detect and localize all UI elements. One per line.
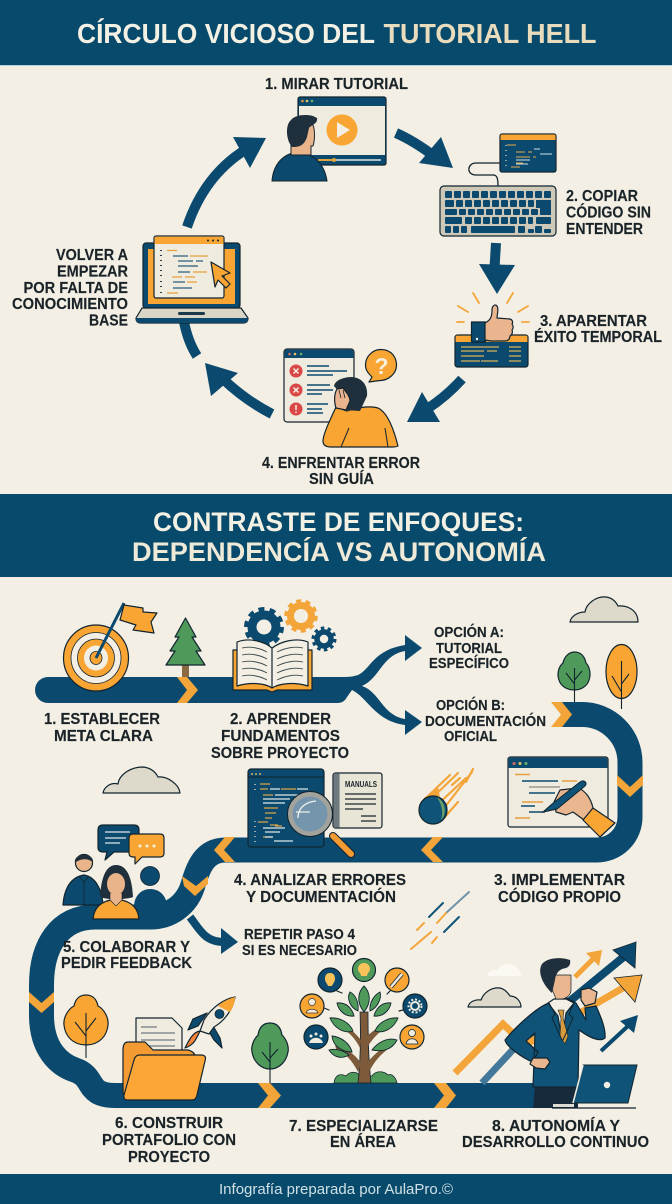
icon: green tree — [252, 1023, 288, 1083]
label: step 2 — [566, 188, 651, 238]
chevrons along the road — [29, 702, 643, 1108]
icon: pine tree — [166, 618, 205, 677]
label: step 1: 1. MIRAR TUTORIAL — [265, 76, 408, 93]
icon: people collaborating with speech bubbles — [63, 825, 167, 919]
label: step 5: PEDIR FEEDBACK — [61, 955, 192, 972]
label: return to start: VOLVER A — [56, 247, 128, 264]
label: step 8: DESARROLLO CONTINUO — [462, 1134, 649, 1151]
label: step 1 road: META CLARA — [54, 728, 153, 745]
label: step 7: 7. ESPECIALIZARSE — [289, 1118, 438, 1135]
header band: top title: CÍRCULO VICIOSO DEL — [77, 18, 375, 49]
icon: cloud top right — [570, 597, 638, 622]
icon: keyboard connected to code monitor — [440, 134, 556, 236]
label: step 1 road: 1. ESTABLECER — [44, 711, 160, 728]
label: step 7: EN ÁREA — [330, 1132, 396, 1151]
header band: top title: TUTORIAL HELL — [384, 18, 596, 49]
icon: orange tree left — [64, 995, 108, 1058]
label: step 2 road — [211, 711, 349, 762]
label: repeat step 4: SI ES NECESARIO — [242, 943, 357, 959]
icon: code screen, magnifier and manual — [248, 769, 382, 854]
label: option B: OFICIAL — [444, 729, 497, 745]
label: return to start: EMPEZAR — [57, 264, 128, 280]
icon: thumbs up over code card — [455, 293, 529, 367]
icon: speed lines — [411, 892, 469, 949]
label: step 5 — [61, 939, 192, 972]
label: repeat step 4 — [242, 927, 357, 959]
label: step 3: ÉXITO TEMPORAL — [534, 327, 662, 346]
label: return to start — [12, 247, 128, 330]
label: step 3 — [534, 313, 662, 346]
label: step 4 road — [234, 872, 406, 906]
label: option A: TUTORIAL — [436, 641, 502, 657]
header band: top title — [0, 0, 672, 66]
label: option A: OPCIÓN A: — [434, 623, 504, 641]
label: step 6: PORTAFOLIO CON — [102, 1132, 236, 1149]
label: option B: DOCUMENTACIÓN — [425, 712, 546, 730]
icon: clouds near businessman — [468, 963, 522, 1007]
icon: person watching video tutorial — [272, 97, 386, 181]
icon: window with hand writing code — [508, 757, 615, 837]
icon: green and orange trees — [558, 644, 637, 709]
arrow: step 1 to step 2 — [396, 133, 453, 168]
arrow: step 2 to step 3 — [479, 243, 515, 294]
label: step 7 — [289, 1118, 438, 1151]
label: step 6: PROYECTO — [128, 1149, 210, 1166]
label: step 3 road — [494, 872, 625, 906]
arrow: step 5 to step 1 — [187, 137, 266, 227]
icon: skill tree with topic bubbles — [300, 958, 427, 1083]
label: option A — [429, 623, 509, 672]
label: step 5: 5. COLABORAR Y — [63, 939, 190, 956]
label: step 4: 4. ENFRENTAR ERROR — [262, 455, 420, 472]
label: step 3 road: 3. IMPLEMENTAR — [494, 872, 625, 889]
header band: contrast of approaches: DEPENDENCÍA VS AUTONOMÍA — [132, 536, 546, 567]
label: step 2: ENTENDER — [566, 221, 643, 238]
label: return to start: CONOCIMIENTO — [12, 296, 128, 313]
road: winding path to the finish — [42, 714, 630, 1096]
label: step 2 road: SOBRE PROYECTO — [211, 745, 349, 762]
label: option B: OPCIÓN B: — [436, 696, 505, 714]
footer: Infografía preparada por AulaPro.© — [219, 1181, 453, 1198]
label: return to start: POR FALTA DE — [24, 280, 128, 297]
icon: open book with gears — [233, 601, 335, 692]
footer — [0, 1174, 672, 1204]
arrow: step 3 to step 4 — [407, 379, 462, 422]
label: repeat step 4: REPETIR PASO 4 — [244, 927, 355, 943]
label: return to start: BASE — [89, 312, 128, 330]
label: step 4 — [262, 455, 420, 488]
icon: comet — [419, 769, 473, 824]
icon: cloud middle left — [103, 767, 180, 793]
label: step 2: CÓDIGO SIN — [566, 202, 651, 222]
chart arrows: growth behind the businessman — [455, 942, 642, 1083]
label: option A: ESPECÍFICO — [429, 655, 509, 672]
icon: frustrated person facing error window: ? — [374, 353, 389, 379]
label: step 8: 8. AUTONOMÍA Y — [492, 1116, 620, 1135]
header band: contrast of approaches — [0, 494, 672, 577]
label: step 2 road: 2. APRENDER — [230, 711, 331, 728]
label: step 8 — [462, 1116, 649, 1151]
arrow: step 4 to step 5 — [205, 363, 272, 414]
icon: frustrated person facing error window — [284, 349, 398, 447]
icon: confident businessman with laptop — [505, 958, 637, 1108]
label: step 2: 2. COPIAR — [566, 188, 638, 205]
label: step 3 road: CÓDIGO PROPIO — [498, 887, 621, 906]
label: step 4 road: 4. ANALIZAR ERRORES — [234, 872, 406, 889]
header band: contrast of approaches: CONTRASTE DE ENFOQUES: — [153, 507, 524, 537]
icon: laptop with code window and cursor — [136, 236, 248, 323]
label: option B — [425, 696, 546, 745]
label: step 6: 6. CONSTRUIR — [115, 1115, 223, 1132]
label: step 2 road: FUNDAMENTOS — [221, 728, 340, 745]
label: step 6 — [102, 1115, 236, 1166]
arrow: segment below laptop — [184, 322, 197, 356]
label: step 4 road: Y DOCUMENTACIÓN — [246, 887, 396, 906]
label: step 3: 3. APARENTAR — [540, 313, 647, 330]
road: first segment with branches — [35, 635, 422, 735]
label: step 1 road — [44, 711, 160, 745]
icon: target with flag — [64, 603, 157, 691]
icon: code screen, magnifier and manual: MANUALS — [345, 780, 377, 789]
icon: folder, document and rocket — [123, 997, 235, 1100]
label: step 4: SIN GUÍA — [309, 469, 374, 488]
